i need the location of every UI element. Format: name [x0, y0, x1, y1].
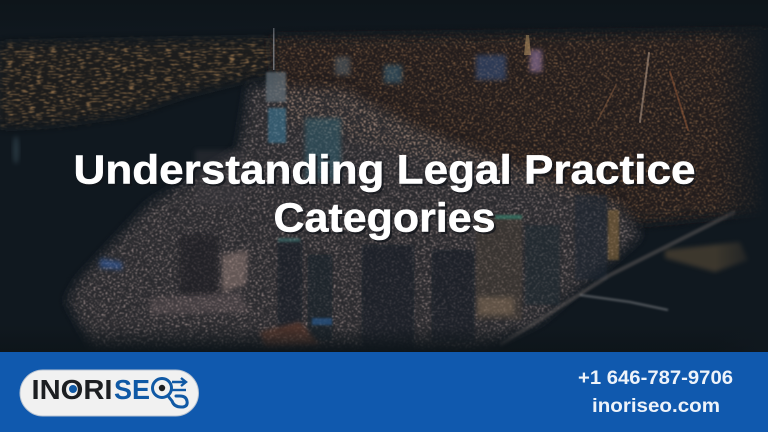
logo mark: inner eye of O — [69, 385, 77, 393]
downtown lights — [68, 85, 640, 350]
contact details — [578, 368, 733, 417]
logo pill — [20, 370, 198, 416]
title — [74, 146, 698, 242]
title: Categories — [274, 194, 496, 240]
midtown neon towers — [335, 35, 542, 83]
logo mark: eye and arrows — [152, 378, 187, 407]
far shore lights — [0, 40, 270, 126]
footer bar — [0, 352, 768, 432]
bridge and piers — [500, 212, 748, 345]
downtown base glow — [68, 85, 640, 350]
title: Understanding Legal Practice — [76, 148, 698, 194]
avenues — [598, 53, 688, 130]
logo — [20, 370, 198, 416]
edge fades — [0, 0, 768, 40]
left water reflection — [13, 136, 19, 164]
logo wordmark: INORI — [32, 374, 112, 405]
logo: SE — [114, 374, 150, 405]
far shore city base glow — [0, 40, 270, 126]
buildings — [100, 28, 619, 350]
upper right city base glow — [270, 32, 768, 222]
phone number: +1 646-787-9706 — [578, 368, 733, 389]
title: Understanding Legal Practice — [74, 146, 696, 192]
title: Categories — [276, 196, 498, 242]
upper right city lights — [270, 32, 768, 222]
website: inoriseo.com — [592, 396, 720, 417]
